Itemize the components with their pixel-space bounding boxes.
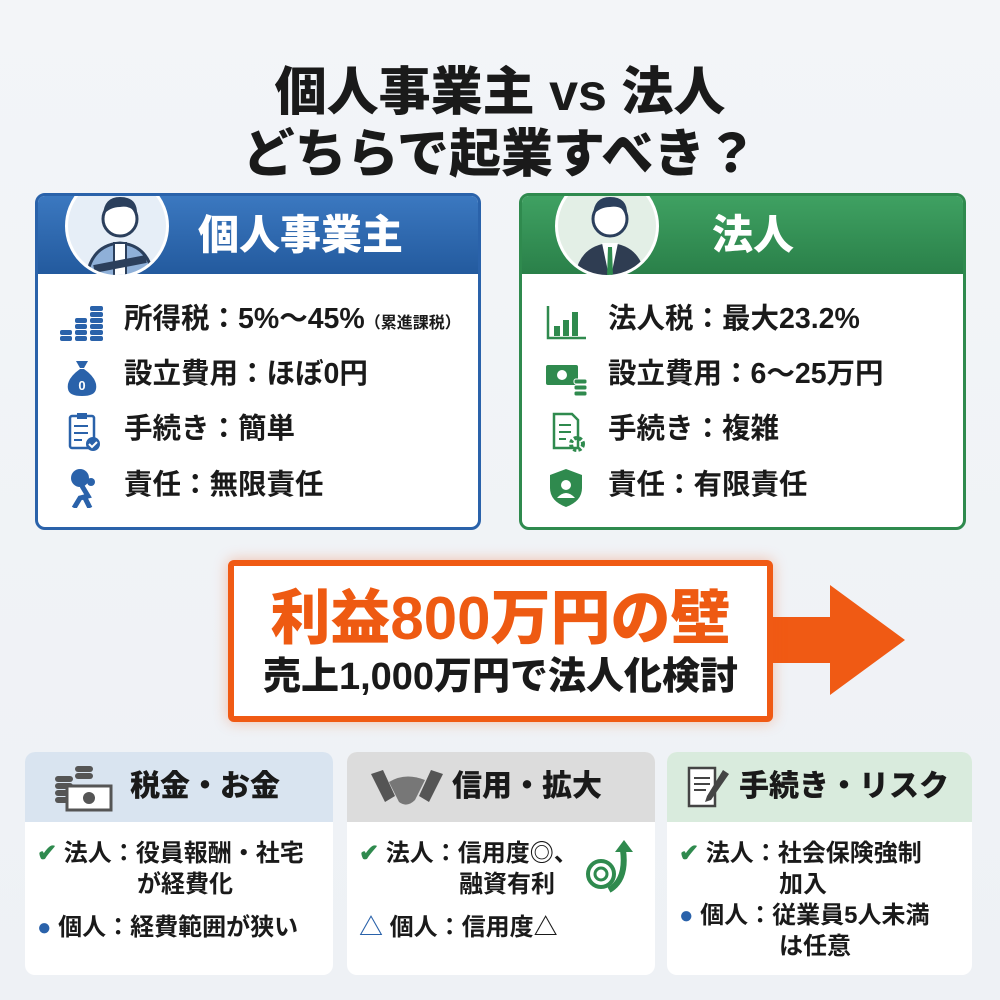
icon: document gear	[552, 412, 585, 452]
title: 個人事業主 vs 法人	[275, 64, 725, 122]
panel: procedure & risk	[667, 752, 972, 975]
text: indiv: は任意	[779, 933, 851, 960]
panel: sole proprietor: 責任：無限責任	[124, 469, 324, 501]
icon: burden	[71, 469, 95, 508]
row: income tax	[60, 303, 461, 341]
icon: handshake	[371, 770, 443, 805]
text: corp: 融資有利	[459, 871, 555, 898]
icon: money bag	[68, 361, 96, 396]
avatar	[555, 174, 659, 278]
avatar	[65, 174, 169, 278]
row: procedure	[68, 413, 295, 451]
panel: corporation: 法人税：最大23.2%	[608, 303, 860, 335]
callout heading: 利益800万円の壁	[270, 585, 731, 652]
icon: coins & bill	[55, 766, 112, 812]
text: corp: 加入	[779, 871, 827, 898]
text: corp: ✔ 法人：役員報酬・社宅	[37, 840, 304, 867]
panel: corporation: 責任：有限責任	[608, 469, 808, 501]
row: liability	[550, 469, 808, 507]
header: 信用・拡大	[452, 770, 602, 803]
panel: sole proprietor: 設立費用：ほぼ0円	[124, 358, 368, 390]
text: indiv: △ 個人：信用度△	[359, 914, 558, 941]
icon: coins	[60, 306, 103, 341]
arrow	[773, 585, 905, 695]
panel: sole proprietor	[35, 193, 481, 530]
panel: credit	[347, 752, 655, 975]
title: どちらで起業すべき？	[243, 126, 757, 184]
row: liability	[71, 469, 324, 508]
text: corp: ✔ 法人：信用度◎、	[359, 840, 578, 867]
text: indiv: ● 個人：経費範囲が狭い	[37, 914, 298, 941]
text: corp	[359, 840, 578, 898]
icon: money bag: 0	[78, 378, 86, 393]
title	[243, 64, 757, 184]
row: setup cost	[546, 358, 884, 396]
header: 手続き・リスク	[739, 770, 949, 803]
icon: clipboard	[68, 413, 100, 451]
header: 法人	[712, 212, 794, 258]
header: 個人事業主	[198, 212, 403, 258]
text: indiv: ● 個人：従業員5人未満	[679, 902, 930, 929]
icon: bar chart	[546, 306, 586, 340]
callout subtext: 売上1,000万円で法人化検討	[263, 656, 738, 698]
text: corp	[679, 840, 922, 898]
icon: cash	[546, 365, 586, 396]
row: corporate tax	[546, 303, 860, 340]
panel: corporation: 手続き：複雑	[608, 413, 779, 445]
text: corp	[37, 840, 304, 898]
header	[25, 752, 333, 822]
header	[38, 196, 478, 274]
icon: document pen	[688, 766, 729, 808]
panel: corporation	[519, 193, 966, 530]
header	[347, 752, 655, 822]
panel: tax & money	[25, 752, 333, 975]
callout: 800万 wall	[228, 560, 773, 722]
panel: corporation: 設立費用：6～25万円	[608, 358, 884, 390]
row: procedure	[552, 412, 779, 452]
text: corp: ✔ 法人：社会保険強制	[679, 840, 922, 867]
header	[522, 196, 963, 274]
text: indiv	[679, 902, 930, 960]
row: setup cost	[68, 358, 368, 396]
panel: sole proprietor: 手続き：簡単	[124, 413, 295, 445]
text: corp: が経費化	[137, 871, 233, 898]
header: 税金・お金	[130, 770, 280, 803]
icon: up arrow	[586, 840, 633, 893]
header	[667, 752, 972, 822]
panel: sole proprietor: 所得税：5%～45%（累進課税）	[124, 303, 461, 335]
icon: shield	[550, 469, 582, 507]
